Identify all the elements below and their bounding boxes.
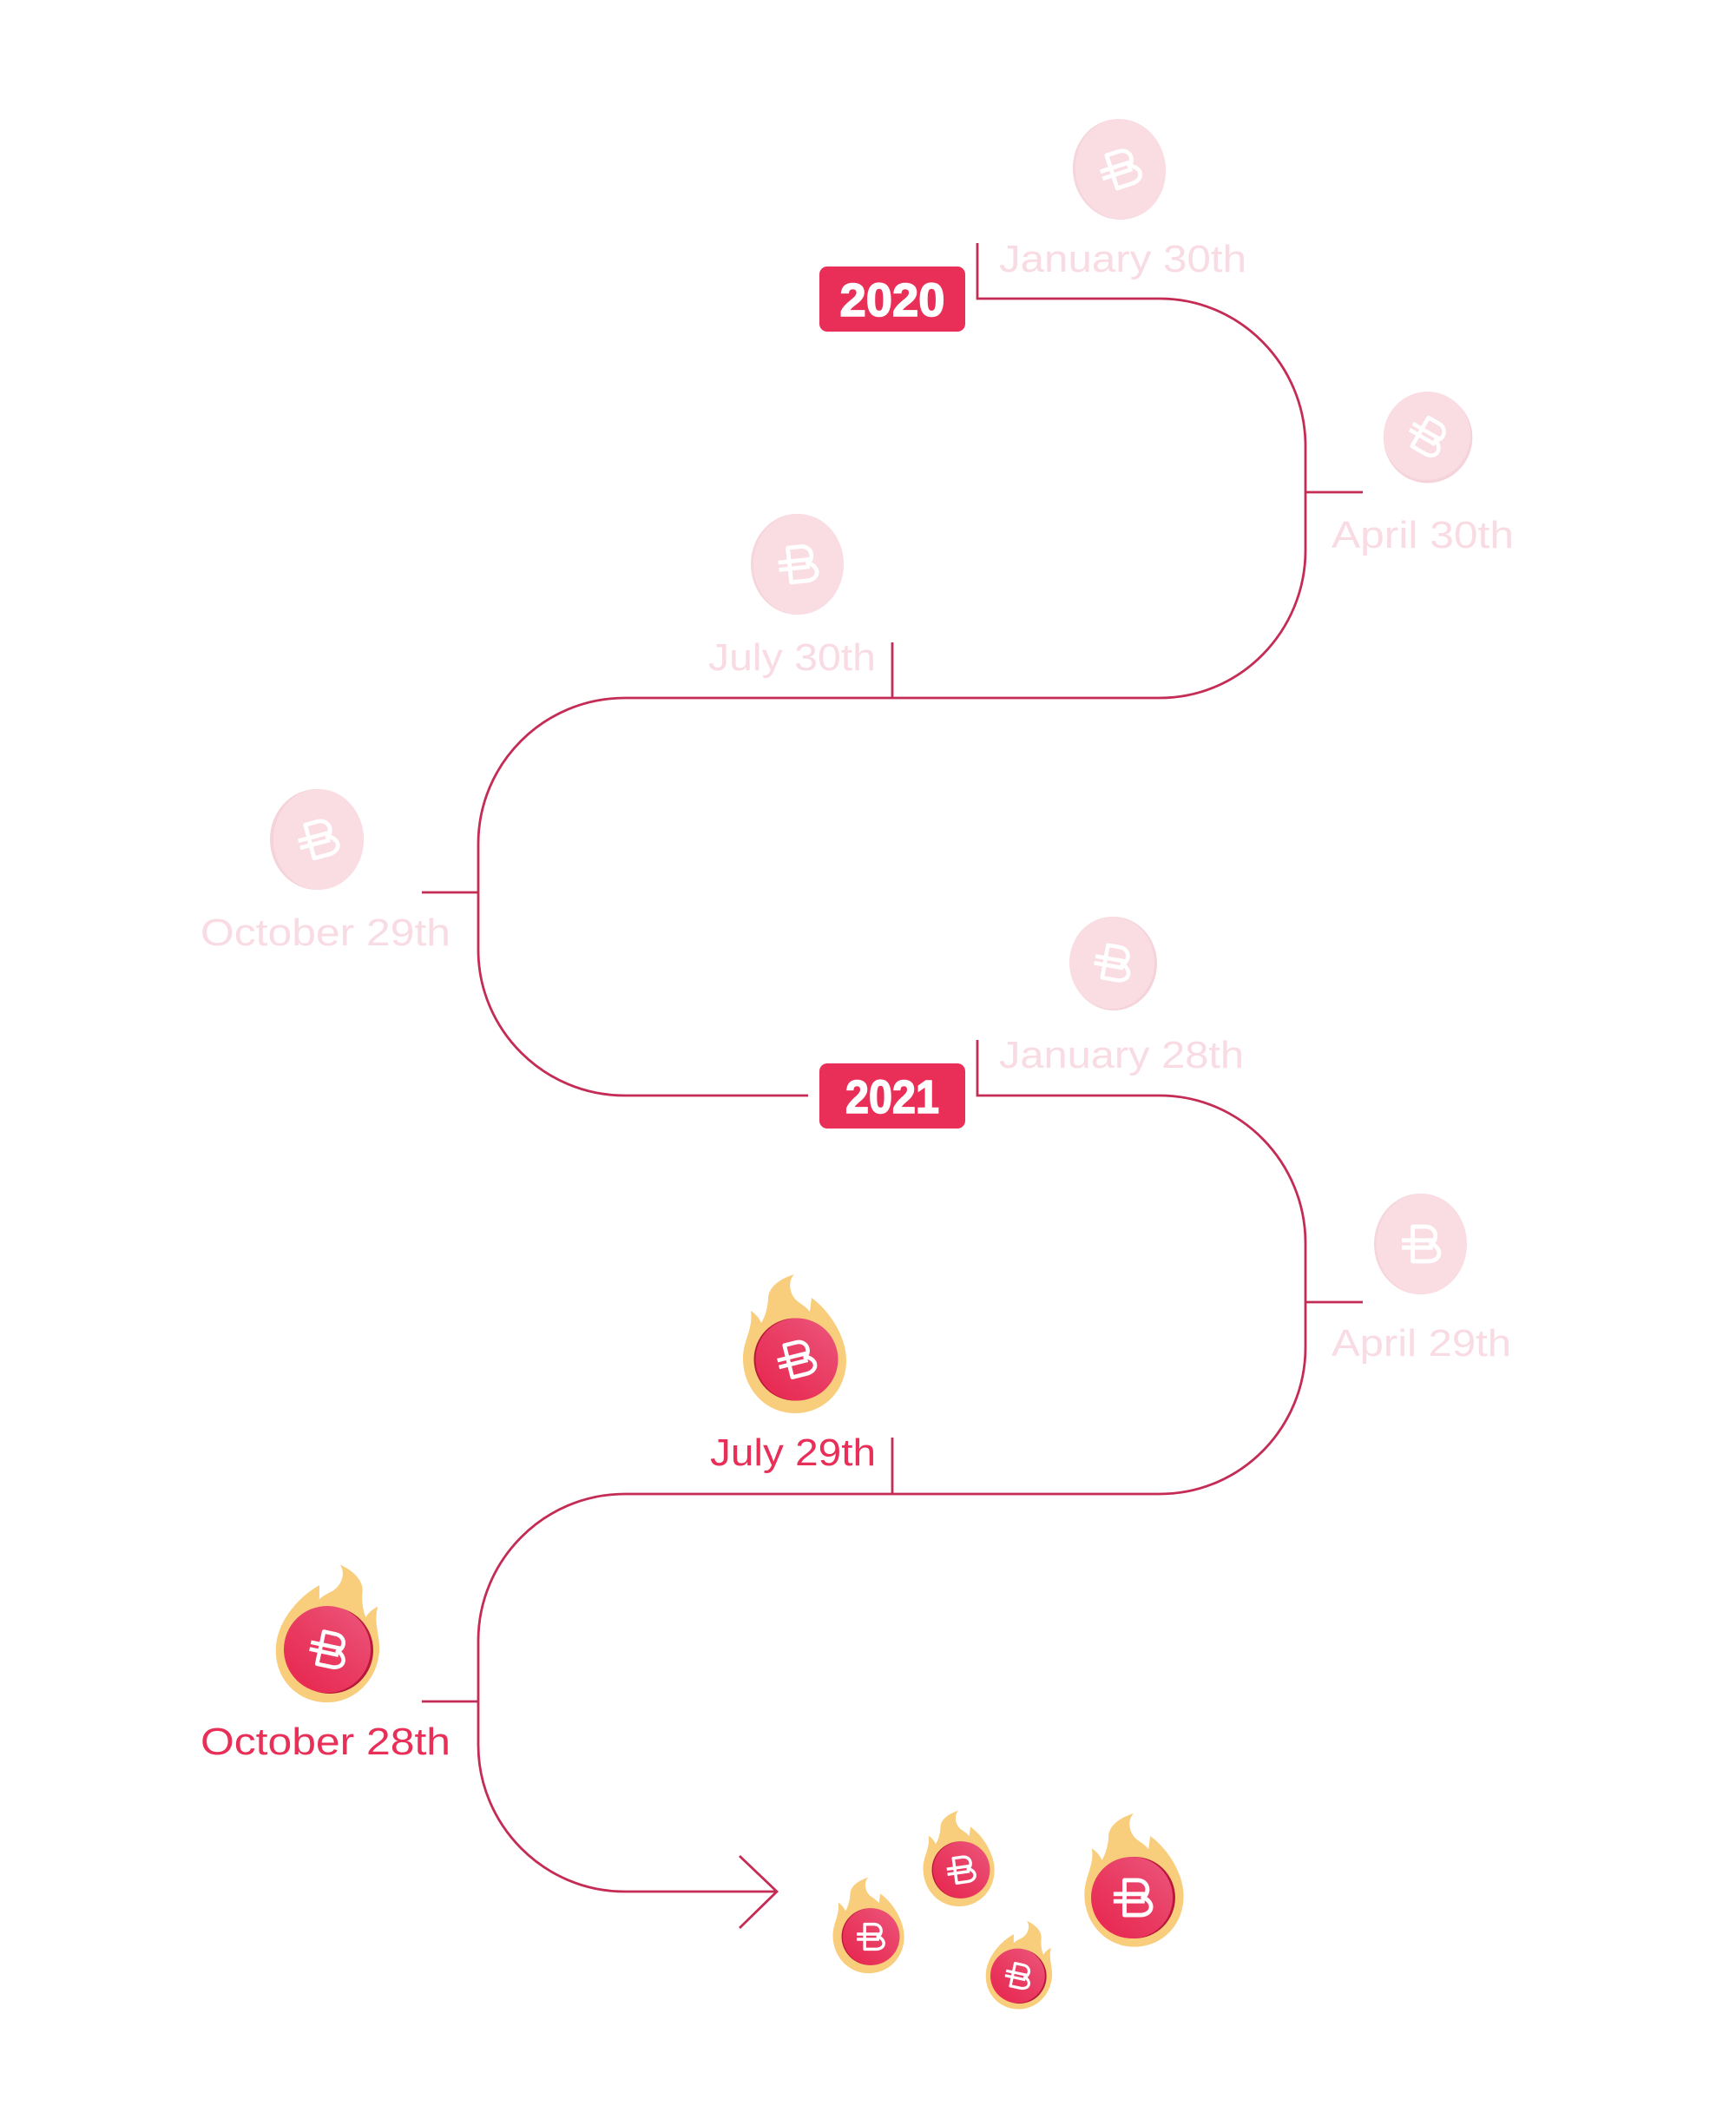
burning coin: small bottom [982,1916,1059,2013]
label: October 28th: October 28th [201,1721,450,1763]
label: July 29th: July 29th [710,1431,876,1474]
burning coin: October 28th [269,1557,391,1709]
burning coin: July 29th [743,1274,846,1413]
burning coin: small left [833,1878,904,1973]
coin: July 30th [751,514,844,615]
label: January 28th: January 28th [999,1034,1244,1076]
badge: 2020: 2020 [840,274,944,326]
badge: 2021 [819,1063,965,1129]
badge: 2020 [819,267,965,332]
burning coin: small top [924,1811,995,1906]
coin: October 29th [270,789,364,890]
timeline path [422,243,1363,1928]
coin: January 30th [1066,113,1173,226]
label: January 30th: January 30th [999,238,1246,280]
coin: April 30th [1371,379,1485,496]
label: July 30th: July 30th [708,636,876,679]
label: October 29th: October 29th [201,911,450,954]
label: April 30th: April 30th [1332,514,1514,556]
burning coin: large right [1084,1813,1184,1947]
badge: 2021: 2021 [845,1071,939,1123]
coin: January 28th [1069,917,1157,1010]
label: April 29th: April 29th [1332,1322,1511,1365]
coin: April 29th [1374,1194,1467,1294]
